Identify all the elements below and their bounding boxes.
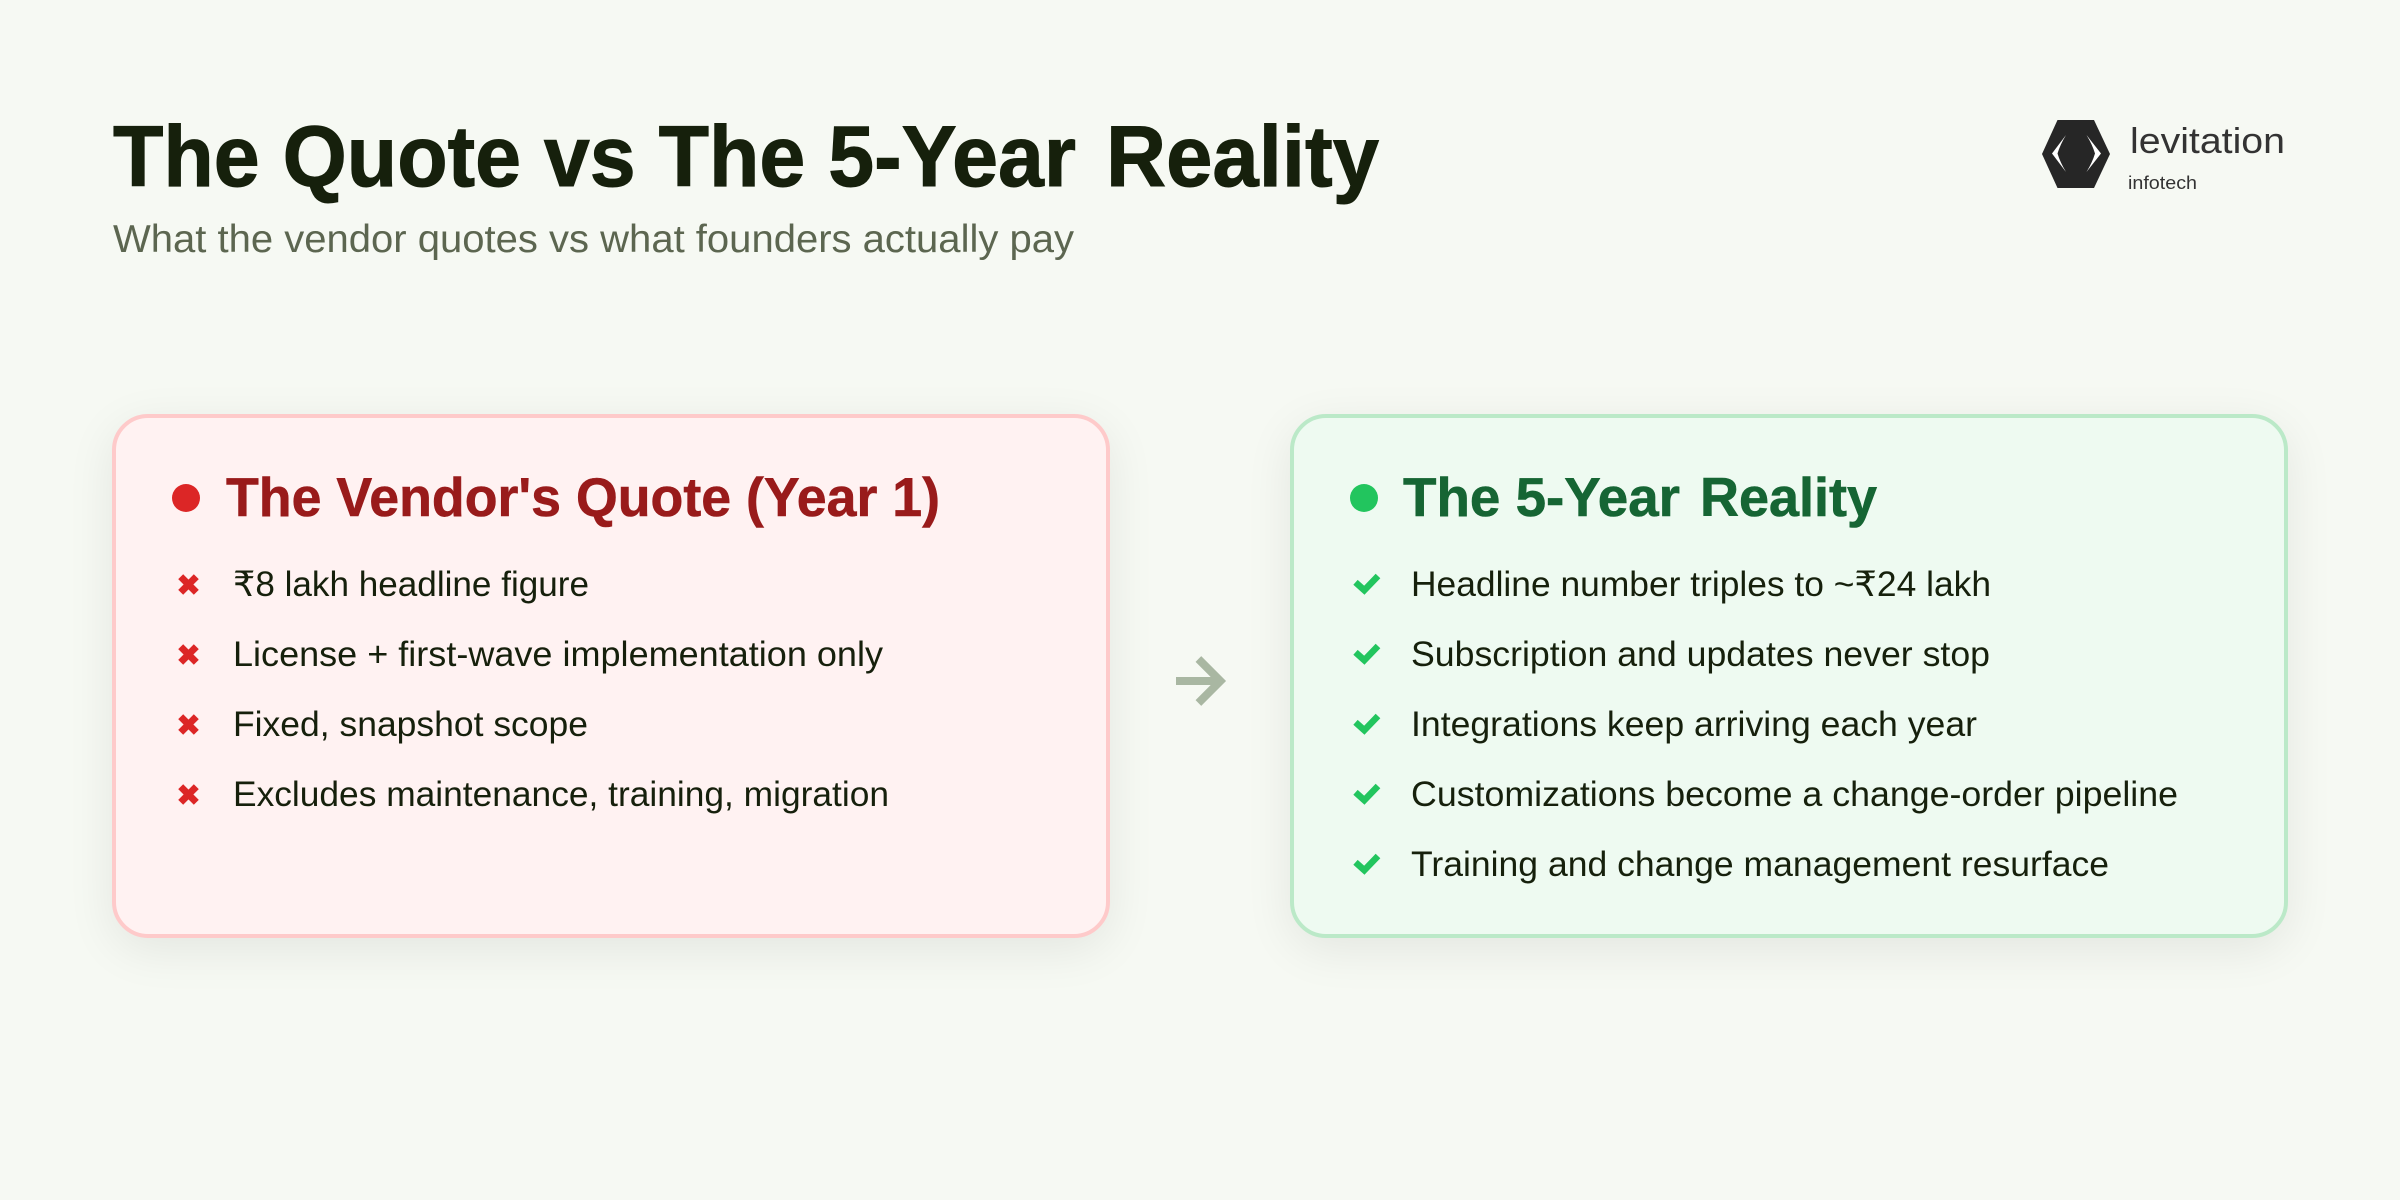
list of reality items	[1356, 565, 2178, 884]
item texts: Headline number triples to ~₹24 lakh	[1411, 565, 1991, 604]
item texts: Subscription and updates never stop	[1411, 635, 1990, 674]
item texts: Excludes maintenance, training, migration	[233, 775, 889, 814]
check icons	[1356, 576, 1378, 870]
list of quote items	[181, 565, 889, 814]
panel: the 5-year reality	[1290, 414, 2288, 938]
item texts	[233, 565, 889, 814]
panel heading: The Vendor's Quote (Year 1)	[226, 466, 940, 528]
item texts: Customizations become a change-order pipeline	[1411, 775, 2178, 814]
item texts: ₹8 lakh headline figure	[233, 565, 589, 604]
icon: hexagon with chevrons	[2042, 120, 2110, 188]
item texts: Integrations keep arriving each year	[1411, 705, 1977, 744]
logo sub-wordmark: infotech	[2128, 173, 2197, 193]
header: title and subtitle	[113, 109, 1380, 261]
logo wordmark: levitation	[2130, 120, 2285, 161]
item texts: Fixed, snapshot scope	[233, 705, 588, 744]
item texts	[1411, 565, 2178, 884]
panel: the vendor's quote	[112, 414, 1110, 938]
panel heading: Reality	[1700, 466, 1877, 528]
status dot: red	[172, 484, 200, 512]
cross icons	[181, 577, 196, 802]
subtitle: What the vendor quotes vs what founders actually pay	[113, 218, 1075, 261]
item texts: Training and change management resurface	[1411, 845, 2109, 884]
panel heading	[1403, 466, 1877, 528]
status dot: green	[1350, 484, 1378, 512]
panel heading: The 5-Year	[1403, 466, 1680, 528]
item texts: License + first-wave implementation only	[233, 635, 884, 674]
title: The Quote vs The 5-Year	[113, 109, 1076, 205]
logo: levitation infotech	[2042, 120, 2285, 193]
arrow	[1176, 656, 1226, 706]
title: Reality	[1106, 109, 1379, 205]
